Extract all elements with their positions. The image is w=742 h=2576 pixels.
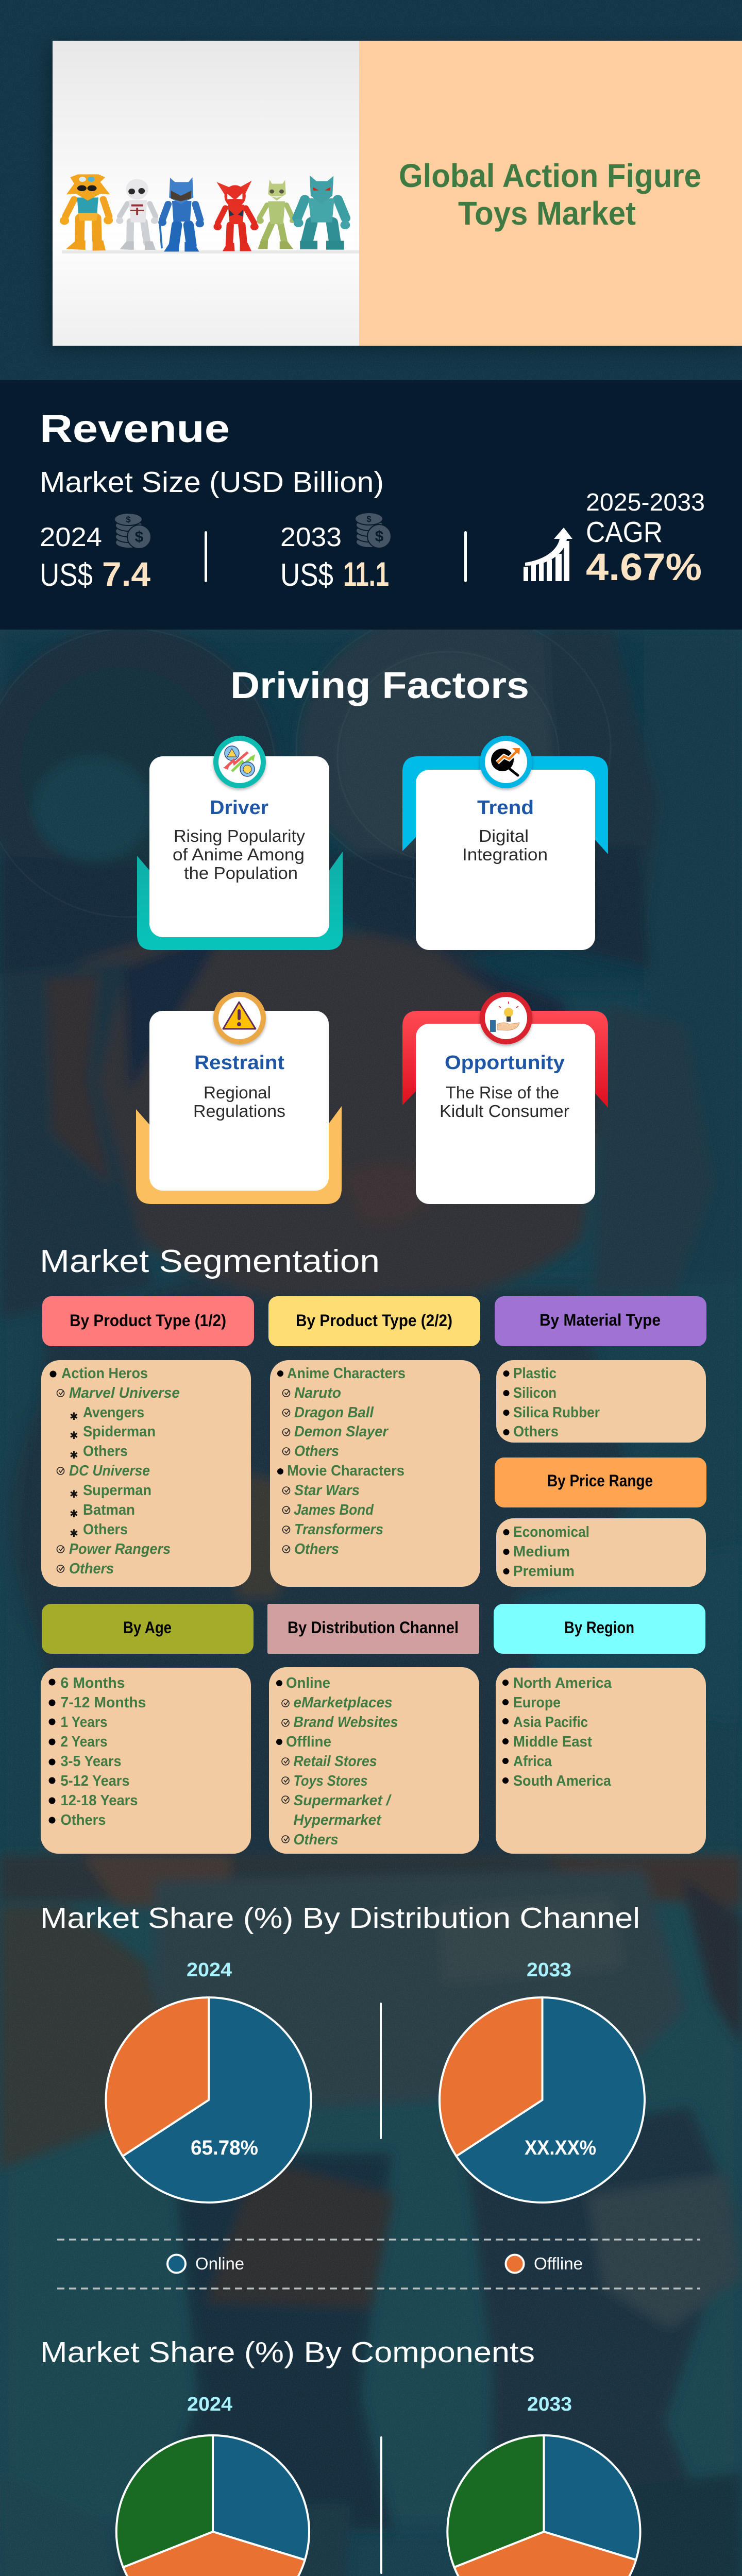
card text: of Anime Among [173,845,305,864]
list: Medium [513,1544,570,1560]
list: 2 Years [61,1734,107,1750]
figure: blue [158,177,204,251]
year label: 2033 [527,1959,571,1981]
header [494,1604,705,1654]
stat: cagr: CAGR [586,516,663,549]
list [41,1668,251,1854]
stat: cagr: 2025-2033 [586,489,705,516]
list: Naruto [294,1385,341,1401]
icon: opportunity [480,992,532,1044]
list: Marvel Universe [69,1385,180,1401]
panel: by material type [495,1296,706,1443]
legend: distribution channel: Online [195,2254,244,2273]
list: Avengers [83,1404,144,1421]
icon: trend [480,736,532,788]
list: eMarketplaces [294,1694,393,1711]
list: 1 Years [61,1714,107,1731]
list: Europe [513,1694,561,1711]
list: Others [294,1443,339,1460]
figure: red [213,181,259,251]
stat: 2024: 7.4 [102,555,150,593]
list: Others [61,1812,106,1828]
pie chart: distribution 2024: 65.78% [191,2137,258,2159]
list: 3-5 Years [61,1753,122,1770]
year label: 2033 [527,2394,572,2415]
card text [462,826,548,864]
legs [155,2154,392,2530]
card title: Restraint [194,1052,284,1074]
heading: market segmentation: Market Segmentation [40,1244,380,1279]
figure: teal [294,176,350,250]
heading: driving factors: Driving Factors [230,665,529,706]
list: Star Wars [294,1482,360,1499]
list: 7-12 Months [61,1694,146,1711]
card text: Rising Popularity [174,826,306,845]
stat: cagr [586,489,705,588]
face [67,925,603,1306]
list: Transformers [294,1521,383,1538]
icon: coins 2024 [114,513,151,549]
hero panel [53,41,742,346]
card text: Integration [462,845,548,864]
list [270,1360,480,1587]
card text: Digital [479,826,529,845]
list [496,1360,706,1443]
panel: restraint [136,992,342,1204]
list: Others [294,1832,338,1848]
icon: driver [213,736,266,788]
panel: by distribution channel [267,1604,479,1854]
list: ✱ [70,1527,78,1539]
header: By Region [564,1618,634,1637]
icon: coins 2024: $ [135,529,144,546]
list: Others [294,1541,339,1557]
list: ✱ [70,1410,78,1422]
list: Superman [83,1482,151,1499]
figure: orange [60,174,113,251]
card title: Trend [477,797,534,819]
stat: 2033: 11.1 [343,555,389,593]
list: Economical [513,1524,589,1540]
header: By Material Type [539,1311,661,1329]
header [268,1296,480,1346]
header [495,1458,706,1507]
heading: market share by distribution channel: Market Share (%) By Distribution Channel [40,1902,640,1935]
list: ✱ [70,1488,78,1500]
panel: by product type 1/2 [41,1296,254,1587]
title: Global Action Figure [399,157,701,194]
title [399,157,701,232]
icon: coins 2033: $ [366,514,372,524]
header: By Age [123,1618,172,1637]
panel: by region [494,1604,706,1854]
list: Demon Slayer [294,1423,389,1440]
year label: 2024 [187,1959,232,1981]
legend: distribution channel: Offline [534,2254,583,2273]
list: Spiderman [83,1423,156,1440]
list: ✱ [70,1429,78,1442]
divider [205,531,207,582]
stat: 2024 [40,522,150,593]
list: Dragon Ball [294,1404,374,1421]
list: Anime Characters [287,1365,406,1382]
stat: cagr: 4.67% [586,546,702,588]
divider [380,2436,382,2574]
list: Movie Characters [287,1463,404,1479]
list [269,1667,479,1854]
list: Premium [513,1563,575,1580]
list [496,1668,706,1854]
divider [464,531,467,582]
title panel [359,41,742,346]
goggles [0,626,278,920]
panel: opportunity [402,992,608,1204]
list: James Bond [294,1502,374,1518]
pie chart: distribution 2024 [106,1997,311,2202]
card text: The Rise of the [446,1083,559,1102]
header [42,1296,254,1346]
list: DC Universe [69,1463,150,1479]
list: 5-12 Years [61,1773,130,1789]
icon: coins 2033: $ [375,528,384,545]
pie chart: components 2033 [447,2435,640,2576]
stat: 2033: 2033 [280,522,342,552]
list: 6 Months [61,1675,125,1691]
list: Power Rangers [69,1541,171,1557]
list: Retail Stores [294,1753,377,1770]
hero photo: row of action figures [53,41,359,346]
list: Supermarket / [294,1792,392,1809]
card text: Regional [204,1083,271,1102]
card text: the Population [184,863,298,883]
panel: revenue [0,380,742,630]
list: Batman [83,1502,135,1518]
card title: Opportunity [445,1052,565,1074]
title: Toys Market [458,195,636,232]
stat: 2033 [280,522,389,593]
stat: 2024: 2024 [40,522,102,552]
list: Online [286,1675,330,1691]
panel: by price range [495,1458,706,1587]
icon: growth chart arrow [524,528,572,581]
card title: Driver [210,797,268,819]
heading: market share by components: Market Share (%) By Components [40,2336,535,2369]
stat: 2033: US$ [280,557,333,593]
header: By Product Type (1/2) [70,1311,226,1330]
figure: green [257,179,295,249]
header: By Price Range [547,1471,653,1490]
list: Offline [286,1734,331,1750]
list: Toys Stores [294,1773,368,1789]
header [267,1604,479,1654]
divider [380,2003,382,2139]
list: Others [83,1521,128,1538]
list: Others [69,1561,114,1577]
panel: by age [41,1604,254,1854]
year label: 2024 [187,2394,232,2415]
belt and hands [0,1855,742,1901]
header [495,1296,706,1346]
list: Middle East [513,1734,592,1750]
stat: 2024: US$ [40,557,93,593]
legend: distribution channel [57,2240,700,2289]
list: Others [513,1423,559,1440]
list: Silica Rubber [513,1404,600,1421]
icon: restraint [213,992,266,1044]
card text: Kidult Consumer [440,1101,569,1121]
subheading: market size: Market Size (USD Billion) [40,466,384,499]
hair [0,845,649,994]
list: South America [513,1773,612,1789]
list: Action Heros [61,1365,148,1382]
body [31,1288,634,1855]
pie chart: distribution 2033 [440,1997,645,2202]
list: Others [83,1443,128,1460]
panel: driver [137,736,343,950]
header [42,1604,254,1654]
list: ✱ [70,1449,78,1461]
list [41,1360,251,1587]
pie chart: distribution 2033: XX.XX% [525,2137,596,2159]
list: Asia Pacific [513,1714,588,1731]
card text [193,1083,285,1121]
figure: white [116,179,158,250]
panel: trend [402,736,608,950]
list: North America [513,1675,612,1691]
list [496,1518,706,1587]
header: By Distribution Channel [288,1618,459,1637]
panel: by product type 2/2 [268,1296,480,1587]
list: Hypermarket [294,1812,382,1828]
card text [173,826,306,883]
header: By Product Type (2/2) [296,1311,452,1330]
heading: revenue: Revenue [40,407,230,451]
pie chart: components 2024 [116,2435,309,2576]
card text: Regulations [193,1101,285,1121]
list: Brand Websites [294,1714,398,1731]
list: Africa [513,1753,552,1770]
list: Plastic [513,1365,556,1382]
list: ✱ [70,1507,78,1520]
goggle rim strokes [0,611,611,917]
icon: coins 2024: $ [126,515,131,524]
list: Silicon [513,1385,556,1401]
icon: coins 2033 [355,513,391,548]
list: 12-18 Years [61,1792,138,1809]
card text [440,1083,569,1121]
